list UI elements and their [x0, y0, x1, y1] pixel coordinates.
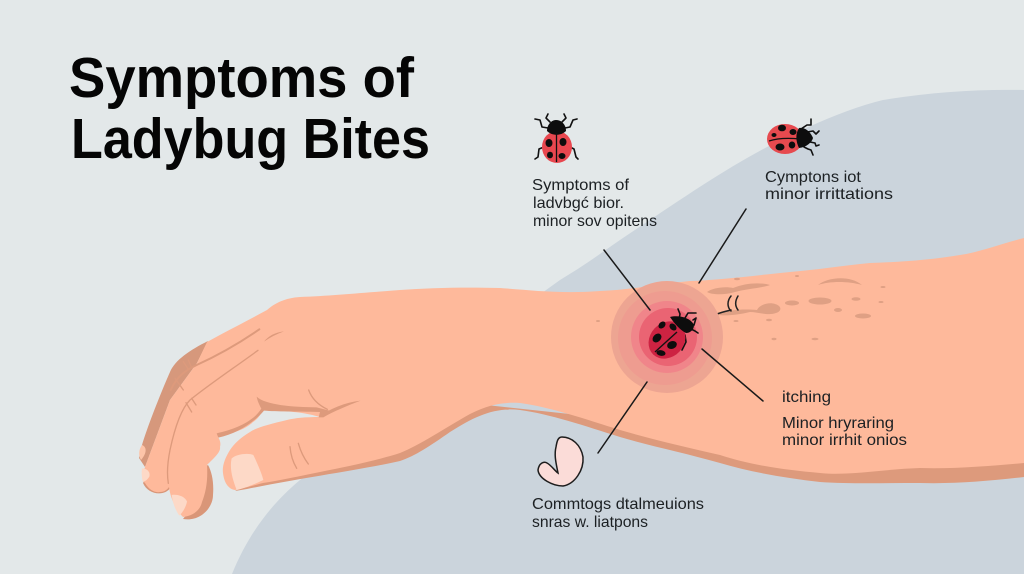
callout text: right: itching [782, 389, 831, 406]
callout text: top left: ladvbgć bior. [533, 195, 624, 212]
callout text: top right: minor irrittations [765, 186, 893, 203]
callout text: right: minor irrhit onios [782, 432, 907, 449]
palm fold [217, 397, 329, 438]
knuckle crescent [264, 331, 284, 342]
front finger shadow rim [183, 465, 213, 519]
skin marks [596, 275, 886, 340]
callout text: top left: Symptoms of [532, 177, 630, 194]
title: Symptoms of [69, 46, 415, 110]
thumb web wedge [319, 401, 361, 417]
thumb nail [231, 454, 263, 490]
blue background shape [232, 90, 1024, 574]
back finger tip [139, 445, 146, 460]
callout text: top left [532, 177, 657, 230]
arm and hand illustration [139, 238, 1024, 519]
callout text: top right [765, 169, 893, 203]
callout text: bottom [532, 496, 704, 531]
callout text: bottom: snras w. liatpons [532, 514, 648, 531]
itch marks [717, 296, 738, 314]
callout text: right [782, 389, 907, 449]
middle finger nail [142, 468, 150, 482]
bite redness rings [611, 281, 723, 393]
callout text: bottom: Commtogs dtalmeuions [532, 496, 704, 513]
front finger nail [172, 495, 187, 516]
callout text: right: Minor hryraring [782, 415, 894, 432]
icon: ladybug top right [767, 119, 819, 155]
arm and hand skin [143, 238, 1024, 517]
icon: skin patch [538, 437, 583, 486]
title [69, 46, 430, 171]
middle finger shadow rim [143, 478, 171, 493]
ladybug on the bite [641, 309, 698, 366]
back finger dark strip [139, 341, 208, 467]
hand detail lines and nails [142, 329, 361, 516]
callout text: top left: minor sov opitens [533, 213, 657, 230]
callout lines [598, 209, 763, 453]
arm and thumb shadow band [235, 400, 1024, 491]
callout text: top right: Cymptons iot [765, 169, 862, 186]
title: Ladybug Bites [71, 107, 430, 171]
icon: ladybug top left [535, 114, 578, 163]
